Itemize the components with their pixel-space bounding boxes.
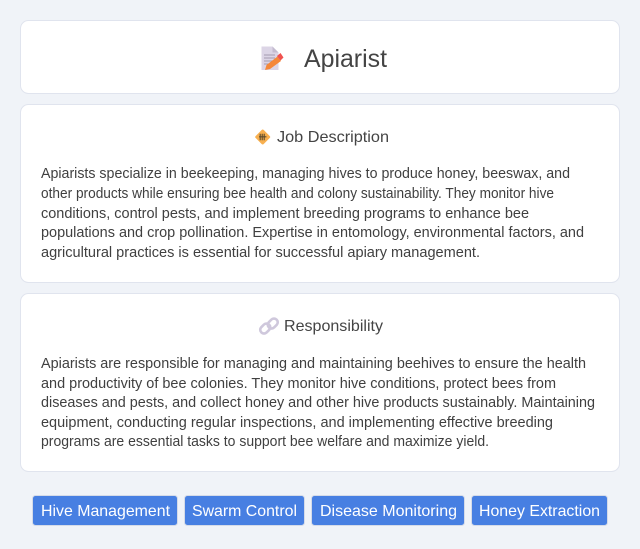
tag: disease monitoring: Disease Monitoring	[320, 503, 457, 520]
panel: job description	[20, 104, 620, 282]
panel: title	[20, 20, 620, 94]
tag: swarm control: Swarm Control	[192, 503, 297, 520]
title text: Apiarist	[304, 45, 387, 73]
text block: responsibility: diseases and pests, and collect honey and other hive products sustainably. Maintaining	[41, 395, 595, 411]
icon: diamond sign	[255, 129, 271, 145]
text block: job description: conditions, control pests, and implement breeding programs to enhance bee	[41, 206, 529, 222]
tag: honey extraction: Honey Extraction	[479, 503, 600, 520]
text block: responsibility: and productivity of bee colonies. They monitor hive conditions, protect bees from	[41, 376, 556, 392]
text block: job description	[41, 166, 584, 261]
text block: responsibility: Apiarists are responsible for managing and maintaining beehives to ensure the health	[41, 356, 586, 372]
tag: hive management	[32, 496, 178, 526]
tag: hive management: Hive Management	[41, 503, 171, 520]
icon: document with pencil	[262, 46, 284, 70]
text block: responsibility: programs are essential tasks to support bee welfare and maximize yield.	[41, 434, 489, 450]
text block: responsibility: equipment, conducting regular inspections, and implementing effective breeding	[41, 415, 553, 431]
heading: responsibility: Responsibility	[284, 318, 383, 335]
tag: honey extraction	[472, 496, 608, 526]
text block: job description: Apiarists specialize in beekeeping, managing hives to produce honey, beeswax, and	[41, 166, 570, 182]
text block: job description: populations and crop pollination. Expertise in entomology, environmental factors, and	[41, 225, 584, 241]
tag: disease monitoring	[312, 496, 464, 526]
text block: job description: agricultural practices is essential for successful apiary management.	[41, 245, 480, 261]
icon: chain link	[259, 317, 279, 335]
text block: job description: other products while ensuring bee health and colony sustainability. They monitor hive	[41, 186, 554, 202]
heading: job description: Job Description	[277, 129, 389, 146]
tag: swarm control	[184, 496, 304, 526]
panel: responsibility	[20, 294, 620, 472]
text block: responsibility	[41, 356, 595, 450]
